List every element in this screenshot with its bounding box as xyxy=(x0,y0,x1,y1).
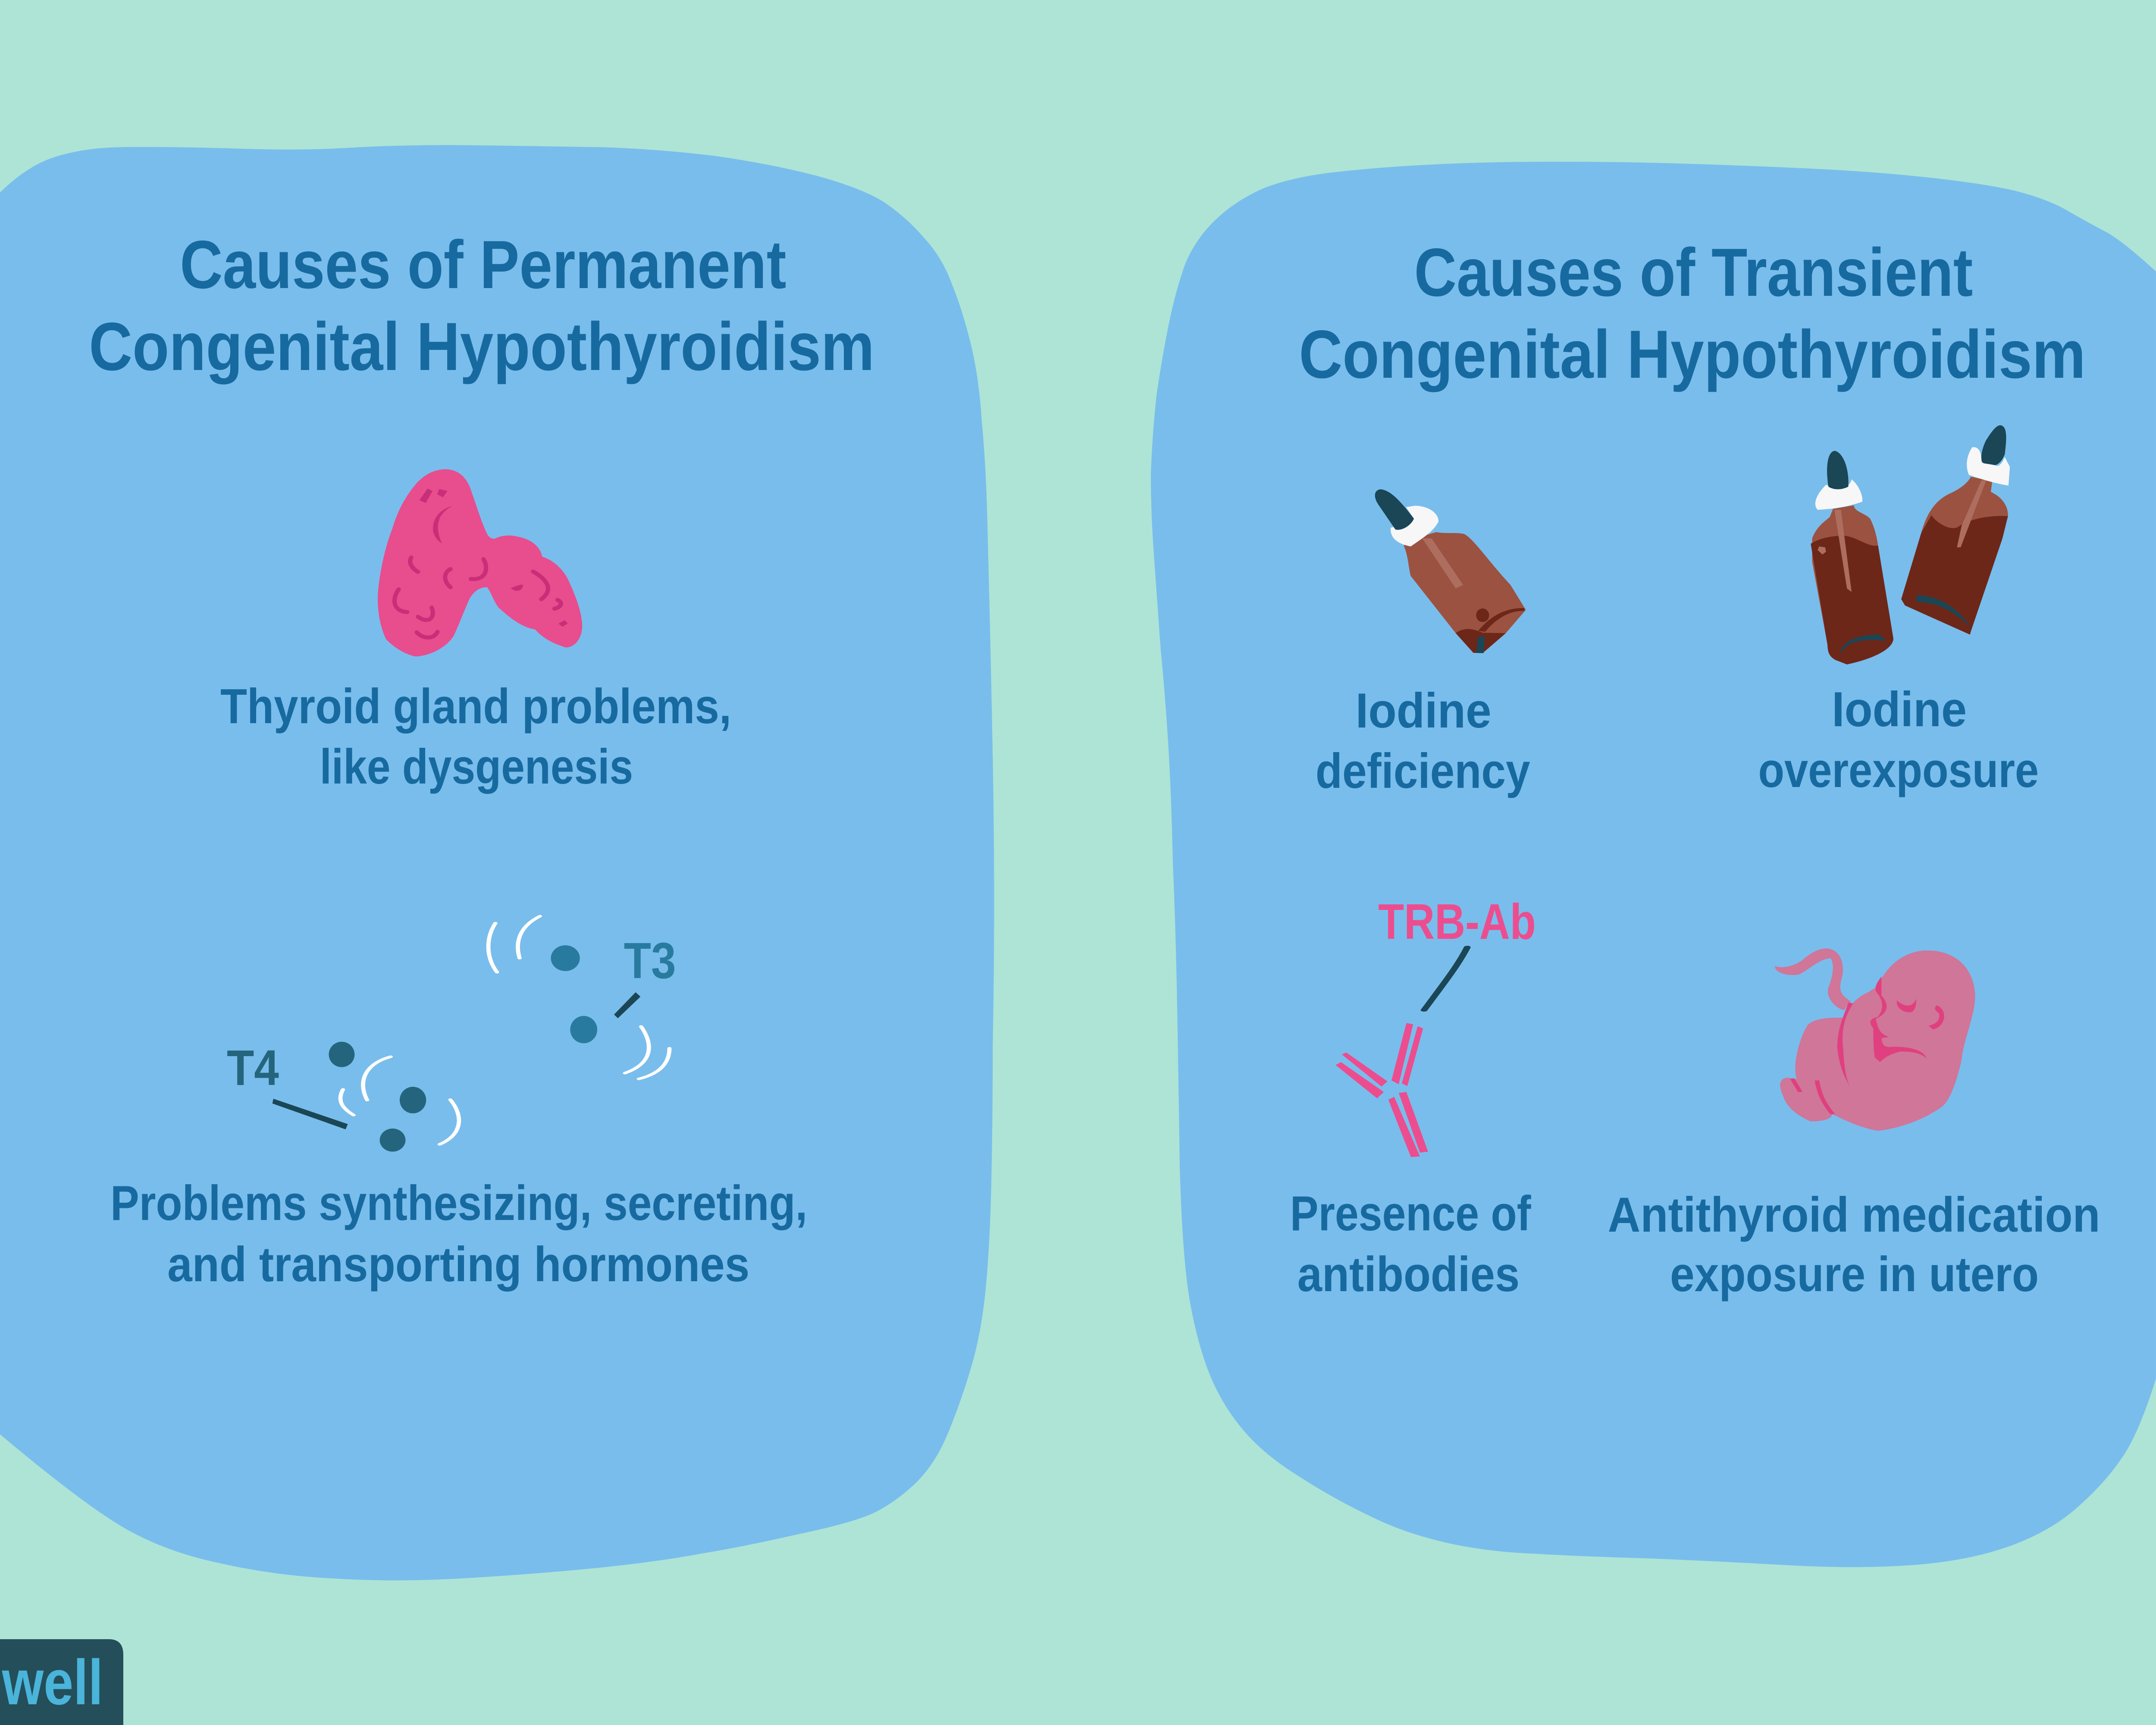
icon: antibody xyxy=(1335,947,1467,1157)
heading: transient: Causes of Transient xyxy=(1414,235,1973,310)
icon: iodine deficiency bottle xyxy=(1375,489,1526,653)
text: iodine overexposure: overexposure xyxy=(1758,743,2039,798)
heading: transient: Congenital Hypothyroidism xyxy=(1299,317,2086,392)
heading: permanent: Congenital Hypothyroidism xyxy=(89,309,874,385)
panel: transient causes xyxy=(1151,162,2156,1567)
T4 label: T4 xyxy=(227,1040,279,1096)
icon: thyroid gland xyxy=(378,469,582,656)
text: hormone problems: and transporting hormones xyxy=(167,1237,749,1292)
text: iodine deficiency: deficiency xyxy=(1316,744,1530,799)
panel: permanent causes xyxy=(0,145,994,1581)
panel background blob: permanent xyxy=(0,145,994,1581)
text: iodine overexposure xyxy=(1758,682,2039,798)
heading: transient xyxy=(1299,235,2086,392)
icon: T3 and T4 hormones xyxy=(227,916,676,1151)
bottle: upright xyxy=(1811,451,1893,665)
text: presence of antibodies: Presence of xyxy=(1290,1186,1532,1241)
text: presence of antibodies xyxy=(1290,1186,1532,1302)
text: iodine deficiency xyxy=(1316,684,1530,799)
text: hormone problems xyxy=(110,1176,807,1292)
text: iodine deficiency: Iodine xyxy=(1356,684,1492,738)
text: antithyroid medication xyxy=(1608,1188,2100,1302)
text: iodine overexposure: Iodine xyxy=(1832,682,1967,737)
icon: iodine overexposure bottles xyxy=(1811,425,2010,665)
heading: permanent: Causes of Permanent xyxy=(180,227,787,303)
text: presence of antibodies: antibodies xyxy=(1297,1247,1520,1302)
icon: fetus xyxy=(1775,948,1975,1131)
T3 label: T3 xyxy=(624,932,676,989)
text: thyroid gland problems: Thyroid gland problems, xyxy=(220,679,731,734)
text: antithyroid medication: exposure in utero xyxy=(1670,1247,2039,1302)
text: thyroid gland problems xyxy=(220,679,731,794)
bottle: tilted xyxy=(1901,425,2010,634)
text: hormone problems: Problems synthesizing, secreting, xyxy=(110,1176,807,1231)
hormone dots and motion arcs xyxy=(273,916,670,1151)
text: antithyroid medication: Antithyroid medication xyxy=(1608,1188,2100,1242)
text: thyroid gland problems: like dysgenesis xyxy=(320,740,633,794)
heading: permanent xyxy=(89,227,874,385)
logo: well: well xyxy=(2,1647,103,1718)
panel background blob: transient xyxy=(1151,162,2156,1567)
label: TRB-Ab: TRB-Ab xyxy=(1378,894,1536,950)
